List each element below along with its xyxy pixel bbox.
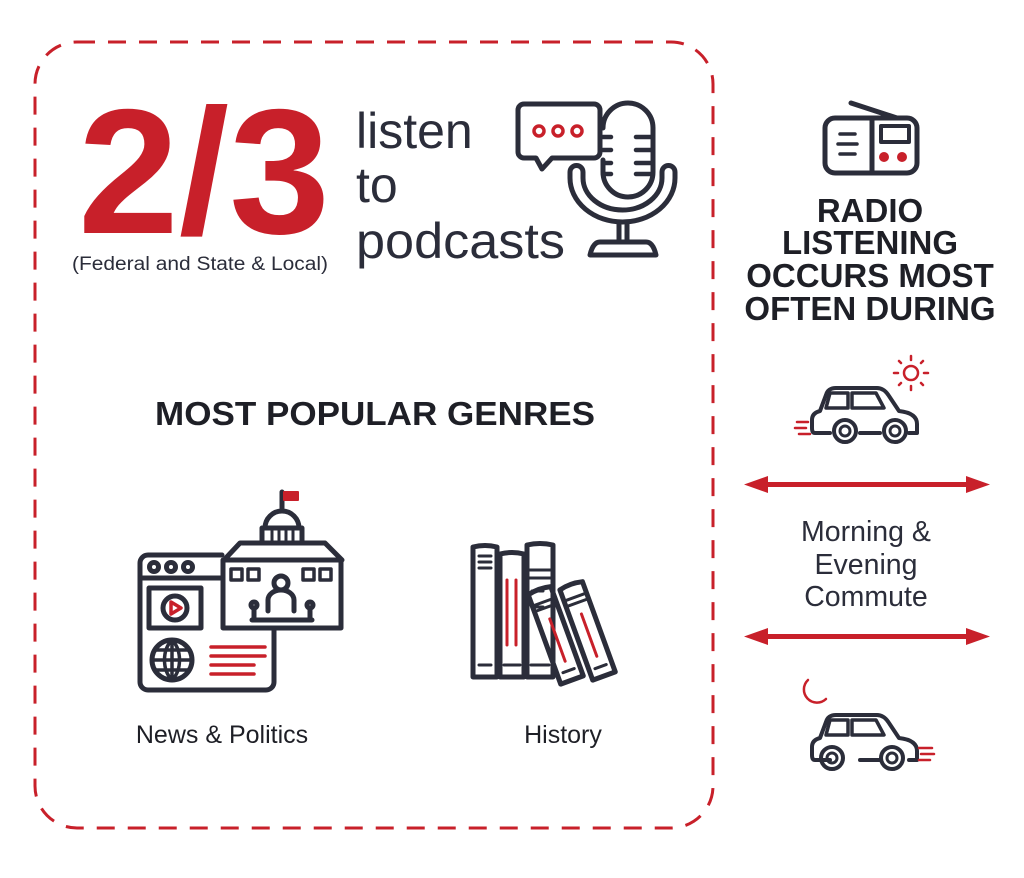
heading: radio listening: RADIO <box>817 192 923 229</box>
icon: history books <box>473 544 615 684</box>
label: history: History <box>524 721 602 749</box>
heading: most popular genres: MOST POPULAR GENRES <box>155 395 595 432</box>
subtitle: Federal and State & Local: (Federal and State & Local) <box>72 254 328 275</box>
text: morning & evening commute: Morning & <box>801 516 931 548</box>
arrow: top double arrow <box>744 476 990 493</box>
arrow: bottom double arrow <box>744 628 990 645</box>
text: morning & evening commute <box>801 516 931 613</box>
heading: radio listening: OFTEN DURING <box>744 290 996 327</box>
heading: radio listening: LISTENING <box>782 224 958 261</box>
text: listen to podcasts: podcasts <box>356 213 565 269</box>
icon: evening car with moon <box>804 680 934 769</box>
text: listen to podcasts: to <box>356 157 398 213</box>
icon: news & politics <box>140 492 342 690</box>
heading: radio listening: OCCURS MOST <box>746 257 994 294</box>
headline stat 2/3: 2/3 <box>78 72 330 271</box>
text: morning & evening commute: Evening <box>814 549 918 581</box>
text: listen to podcasts: listen <box>356 103 473 159</box>
heading: radio listening <box>744 192 996 327</box>
label: news & politics: News & Politics <box>136 721 308 749</box>
icon: morning car with sun <box>795 356 928 442</box>
icon: microphone with chat bubble <box>518 103 675 255</box>
icon: radio <box>825 103 917 173</box>
panel: podcasts dashed border <box>35 42 713 828</box>
text: listen to podcasts <box>356 103 565 269</box>
text: morning & evening commute: Commute <box>804 581 928 613</box>
